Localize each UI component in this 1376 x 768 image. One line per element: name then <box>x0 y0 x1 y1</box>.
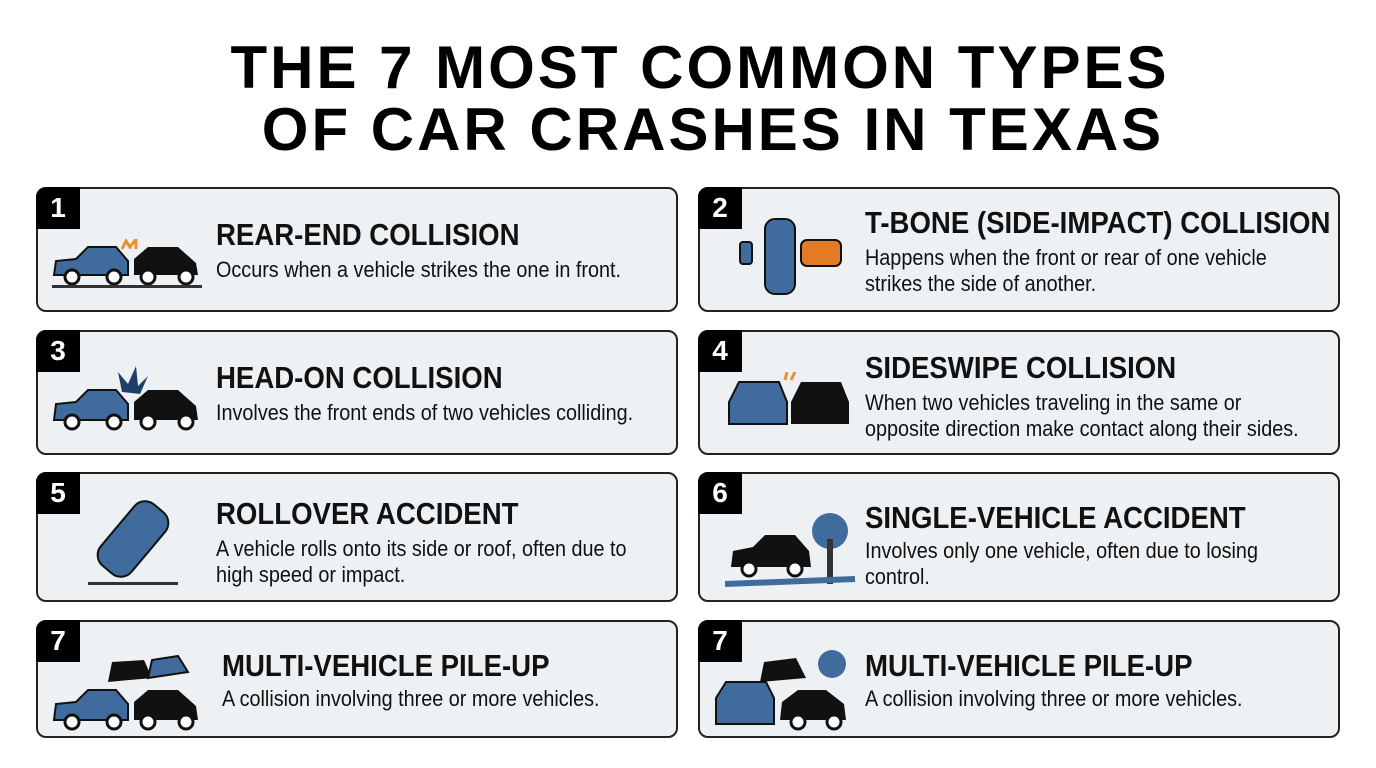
badge 7 <box>36 620 80 662</box>
badge 3 <box>36 330 80 372</box>
title: THE 7 MOST COMMON TYPES <box>230 34 1170 101</box>
description: opposite direction make contact along their sides. <box>865 416 1299 441</box>
description <box>865 245 1267 296</box>
badge 5 <box>36 472 80 514</box>
badge 7 <box>698 620 742 662</box>
description: Occurs when a vehicle strikes the one in front. <box>216 257 621 282</box>
title: OF CAR CRASHES IN TEXAS <box>262 96 1164 163</box>
description <box>865 390 1299 441</box>
heading: SIDESWIPE COLLISION <box>865 350 1176 385</box>
heading: MULTI-VEHICLE PILE-UP <box>222 648 550 683</box>
heading: MULTI-VEHICLE PILE-UP <box>865 648 1193 683</box>
panel: 4 sideswipe <box>698 330 1340 455</box>
badge 6 <box>698 472 742 514</box>
badge 4: 4 <box>712 335 728 366</box>
description: Involves only one vehicle, often due to losing <box>865 538 1258 563</box>
panel: 7 pile-up right <box>698 620 1340 738</box>
description <box>216 536 627 587</box>
icon: rollover <box>88 500 178 585</box>
badge 2 <box>698 187 742 229</box>
badge 2: 2 <box>712 192 728 223</box>
description: high speed or impact. <box>216 562 405 587</box>
panel: 5 rollover <box>36 472 678 602</box>
badge 7: 7 <box>712 625 728 656</box>
badge 7: 7 <box>50 625 66 656</box>
badge 5: 5 <box>50 477 66 508</box>
description: Involves the front ends of two vehicles colliding. <box>216 400 633 425</box>
panel: 7 pile-up left <box>36 620 678 738</box>
panel: 3 head-on <box>36 330 678 455</box>
icon: t-bone <box>739 218 842 295</box>
panel: 6 single-vehicle <box>698 472 1340 602</box>
heading: REAR-END COLLISION <box>216 217 519 252</box>
title <box>230 34 1170 163</box>
panel: 2 t-bone <box>698 187 1340 312</box>
icon: single vehicle <box>725 513 856 587</box>
badge 1: 1 <box>50 192 66 223</box>
badge 1 <box>36 187 80 229</box>
badge 4 <box>698 330 742 372</box>
icon: pile-up <box>715 650 846 730</box>
description: A vehicle rolls onto its side or roof, often due to <box>216 536 627 561</box>
description: A collision involving three or more vehicles. <box>222 686 599 711</box>
badge 3: 3 <box>50 335 66 366</box>
badge 6: 6 <box>712 477 728 508</box>
description <box>865 538 1258 589</box>
description: control. <box>865 564 930 589</box>
heading: HEAD-ON COLLISION <box>216 360 503 395</box>
icon: head-on <box>52 366 198 430</box>
heading: T-BONE (SIDE-IMPACT) COLLISION <box>865 205 1330 240</box>
description: strikes the side of another. <box>865 271 1096 296</box>
icon: rear-end <box>52 239 202 288</box>
heading: SINGLE-VEHICLE ACCIDENT <box>865 500 1246 535</box>
heading: ROLLOVER ACCIDENT <box>216 496 518 531</box>
panel: 1 rear-end <box>36 187 678 312</box>
description: Happens when the front or rear of one vehicle <box>865 245 1267 270</box>
description: A collision involving three or more vehicles. <box>865 686 1242 711</box>
icon: sideswipe <box>728 372 849 425</box>
icon: pile-up <box>52 654 198 730</box>
description: When two vehicles traveling in the same or <box>865 390 1241 415</box>
